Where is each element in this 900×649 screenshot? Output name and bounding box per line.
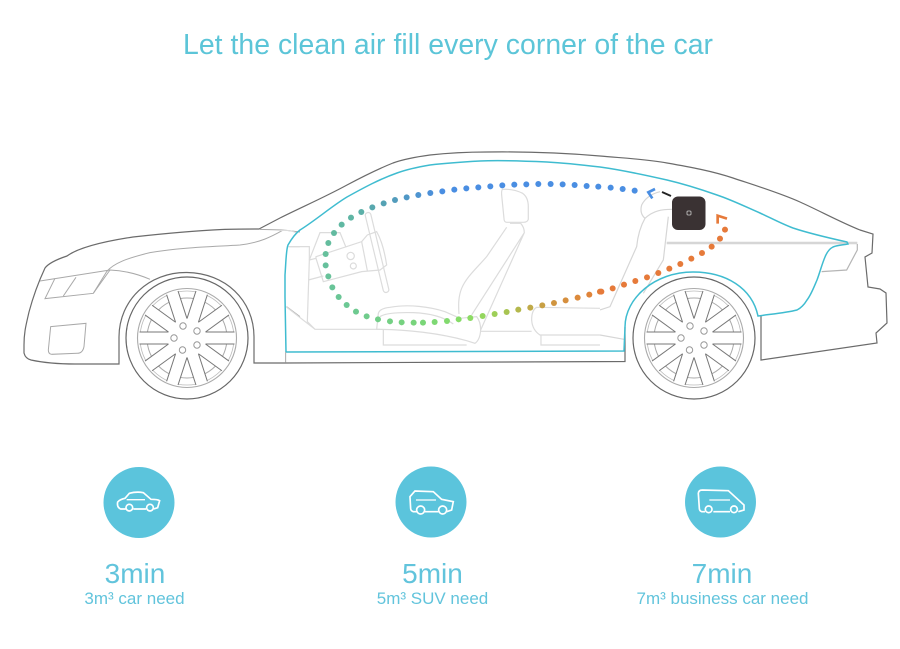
rear wheel (633, 277, 755, 399)
airflow dotted path: cabin front (323, 181, 603, 326)
icon: van (685, 466, 756, 538)
airflow dotted path: rear end and arrows (598, 185, 728, 295)
car illustration (24, 152, 887, 399)
icon: sedan (104, 467, 174, 538)
front wheel (126, 277, 248, 399)
caption: 5m³ SUV need (377, 589, 488, 608)
stat: 3 minutes (84, 467, 185, 608)
stat: 7 minutes (637, 466, 808, 608)
value: 7min (692, 558, 752, 589)
title: Let the clean air fill every corner of the car (183, 29, 713, 61)
caption: 7m³ business car need (637, 589, 808, 608)
value: 3min (105, 558, 165, 589)
value: 5min (402, 558, 463, 589)
car body outline (24, 152, 887, 364)
interior: dashboard, steering wheel and front seat (280, 189, 600, 345)
caption: 3m³ car need (84, 589, 185, 608)
interior: front panel lines (40, 229, 300, 363)
icon: SUV (396, 466, 466, 538)
air purifier device (662, 192, 706, 230)
stat: 5 minutes (377, 466, 488, 608)
interior: rear seat, belt line and tail light (600, 192, 857, 339)
cabin outline in cyan (285, 161, 848, 352)
